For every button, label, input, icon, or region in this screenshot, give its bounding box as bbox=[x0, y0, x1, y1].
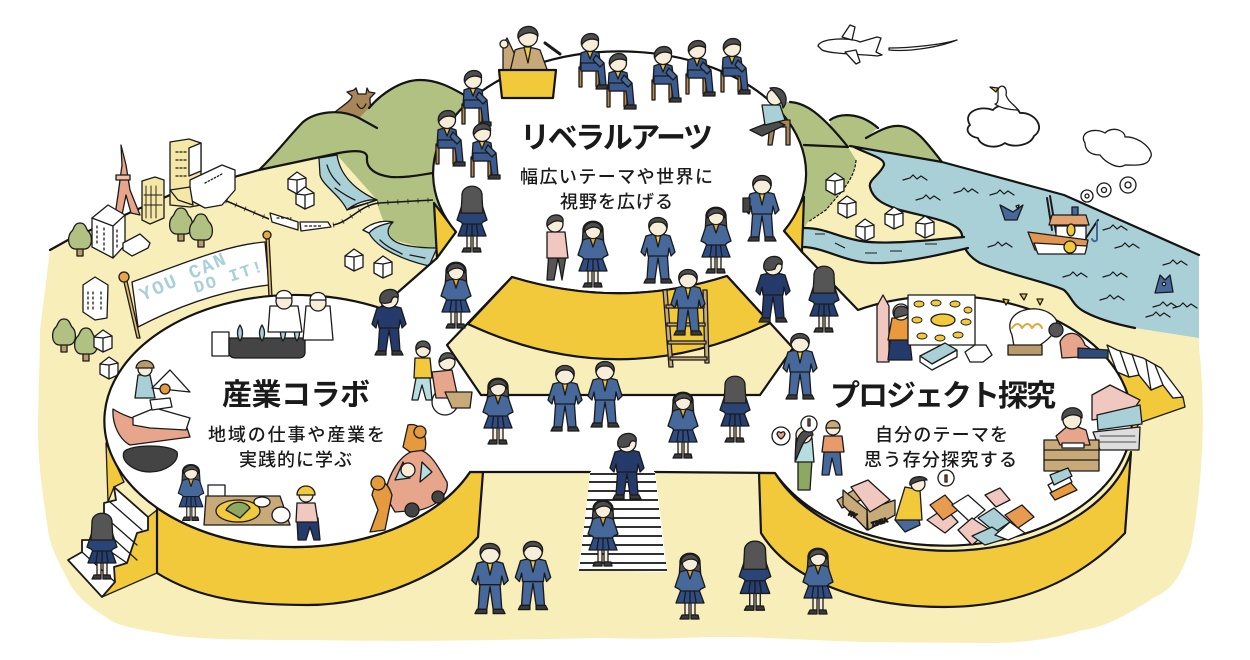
right disc: speech bubbles bbox=[772, 416, 817, 445]
right disc: puzzle box: MY bbox=[847, 510, 858, 521]
city: white building bbox=[92, 205, 150, 258]
right disc: paper ball bbox=[965, 345, 992, 362]
seated students: left bbox=[436, 71, 500, 179]
student: walking girl bbox=[668, 392, 698, 458]
river: right bbox=[804, 228, 968, 263]
right disc: book stack bbox=[1092, 385, 1142, 450]
icon: train bbox=[270, 213, 331, 231]
river: left upper bbox=[319, 155, 377, 210]
icon: plane bbox=[818, 25, 957, 64]
right disc: boy at desk bbox=[1044, 408, 1099, 471]
yellow triangle: top disc right bbox=[784, 197, 804, 252]
icon: fish tail bbox=[1000, 205, 1023, 220]
student: climbing boy bbox=[671, 270, 705, 335]
right disc: kneeling boy bbox=[895, 470, 954, 532]
text: industry line 1: 地域の仕事や産業を bbox=[208, 425, 385, 445]
helper and wheelchair bbox=[412, 341, 472, 415]
seated students: top row bbox=[579, 34, 750, 109]
left disc: girl with drink bbox=[178, 465, 225, 520]
student: boy back bbox=[756, 256, 790, 322]
hills: left green bbox=[259, 80, 480, 252]
left disc: food tray bbox=[204, 496, 290, 525]
left disc: fisher on boat bbox=[113, 360, 190, 472]
icon: cloud bbox=[1083, 129, 1151, 167]
icon: small houses bbox=[94, 172, 392, 379]
right disc: pencil and orange girl bbox=[877, 295, 914, 362]
hills: right green bbox=[780, 102, 942, 250]
student: walking girl 2 bbox=[720, 376, 750, 442]
city: trees bbox=[53, 208, 212, 361]
students: two boys bottom bbox=[472, 541, 551, 614]
icon: seagull on cloud bbox=[968, 86, 1039, 147]
ladder bbox=[663, 290, 709, 367]
right disc: puzzle box: IDEA bbox=[870, 517, 890, 530]
city: grid building bbox=[142, 177, 164, 224]
stairs: center bbox=[578, 472, 667, 572]
left disc: orange car and workers bbox=[370, 425, 447, 532]
yellow wall: right disc bbox=[759, 452, 1131, 607]
yellow wall: left disc bbox=[157, 472, 483, 605]
left disc: boy with bowl bbox=[272, 486, 320, 540]
river: left lower bbox=[363, 221, 437, 266]
icon: smoke puffs bbox=[1081, 177, 1136, 202]
student: glasses girl bbox=[441, 262, 471, 328]
text: industry line 2: 実践的に学ぶ bbox=[239, 450, 353, 470]
stairs: top right white steps bbox=[1107, 345, 1183, 398]
heading: liberal arts: リベラルアーツ bbox=[520, 122, 713, 155]
city: tall building bbox=[170, 139, 235, 208]
podium bbox=[499, 70, 556, 98]
banner: you can do it bbox=[119, 231, 272, 338]
student: running girl bbox=[483, 378, 513, 444]
right disc: eraser bbox=[920, 343, 957, 370]
students: boy with bag bbox=[743, 176, 779, 241]
right disc: small books bbox=[1048, 468, 1077, 500]
student: back view girl bbox=[457, 186, 487, 252]
yellow wall: top right stair side bbox=[1110, 372, 1185, 440]
right disc: mind map board bbox=[908, 295, 975, 345]
right disc: puzzle box bbox=[837, 480, 895, 530]
yellow wall: left stairs side bbox=[102, 510, 157, 597]
yellow band under top disc bbox=[468, 276, 770, 359]
text: liberal arts line 2: 視野を広げる bbox=[560, 192, 674, 212]
yellow triangle: top disc left bbox=[434, 203, 456, 258]
student: girl clapping bbox=[701, 207, 731, 273]
ground: cream landscape bbox=[38, 147, 1203, 643]
ridge and rail lines bbox=[50, 151, 433, 250]
icon: cow bbox=[335, 88, 375, 122]
right disc: talking pair bbox=[795, 420, 844, 490]
student: boy left corridor bbox=[372, 289, 406, 355]
text: project line 2: 思う存分探究する bbox=[864, 450, 1017, 470]
left disc: fish belt and workers bbox=[212, 290, 333, 358]
right disc: lying person bbox=[1049, 323, 1108, 358]
students: two boys talking bbox=[548, 362, 622, 431]
platform: white trefoil bbox=[104, 50, 1132, 547]
sea bbox=[850, 146, 1199, 338]
text: liberal arts line 1: 幅広いテーマや世界に bbox=[520, 167, 713, 187]
city: small building bbox=[83, 277, 108, 320]
student: girl on left stairs bbox=[87, 513, 117, 579]
inner cream hexagon bbox=[447, 276, 793, 395]
student: girl right corridor bbox=[809, 266, 839, 332]
teacher in pink bbox=[547, 215, 568, 280]
seated woman bbox=[750, 88, 790, 145]
heading: industry collaboration: 産業コラボ bbox=[222, 379, 370, 412]
yellow wall: left side triangle bbox=[106, 443, 124, 502]
icon: fish bbox=[1155, 275, 1173, 293]
students: three girls bottom bbox=[675, 541, 833, 619]
banner: you can do it: DO IT! bbox=[192, 258, 267, 299]
text: project line 1: 自分のテーマを bbox=[875, 425, 1008, 445]
student: girl on stairs bbox=[588, 500, 618, 566]
platform outlines bbox=[104, 51, 1132, 547]
heading: project inquiry: プロジェクト探究 bbox=[830, 380, 1056, 413]
city: Tokyo tower bbox=[114, 145, 140, 225]
student: girl with papers bbox=[578, 221, 608, 287]
stairs: left bbox=[68, 487, 148, 597]
student: boy on phone bbox=[783, 334, 817, 399]
icon: fishing boat bbox=[1028, 196, 1098, 254]
right disc: puzzle pieces bbox=[927, 488, 1034, 545]
right disc: light bulb bbox=[1003, 294, 1057, 355]
banner: you can do it: YOU CAN bbox=[136, 248, 231, 306]
icon: beach houses bbox=[826, 173, 934, 241]
speaker: teacher at podium bbox=[500, 26, 560, 72]
student: glasses boy bbox=[641, 218, 675, 283]
student: boy on stairs bbox=[610, 433, 644, 499]
